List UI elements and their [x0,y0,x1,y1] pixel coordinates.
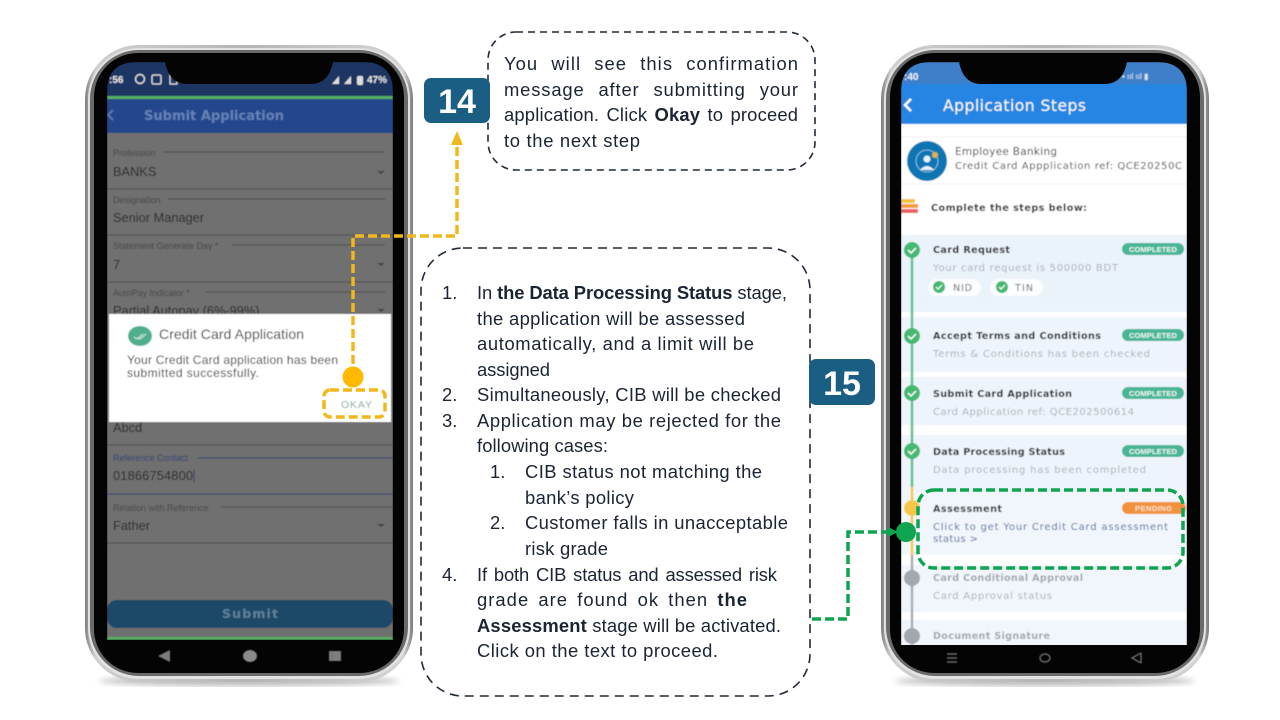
steps heading [901,199,1087,214]
account header [901,137,1187,184]
step: submit card application: Card Application ref: QCE202500614 [933,407,1134,418]
notch [165,62,333,84]
instruction 4: Click on the text to proceed. [477,640,718,661]
instruction 3 [442,410,788,559]
step: card request: Card Request [933,245,1010,256]
step: submit card application: Submit Card Application [933,389,1072,400]
step: data processing status: Data processing has been completed [933,465,1146,476]
instruction 4: Assessment stage will be activated. [477,615,781,636]
step: assessment: status > [933,534,978,545]
account header: Credit Card Appplication ref: QCE20250C [955,161,1182,172]
account header: Employee Banking [955,146,1057,158]
step: assessment [933,502,1186,545]
instruction 1: In the Data Processing Status stage, [477,282,787,303]
navigation bar [947,653,1141,663]
form fields: Father [113,518,151,533]
badge: step 14 [424,78,490,123]
callout: step 14 text: to the next step [504,130,640,151]
form fields: BANKS [113,164,156,179]
phone screen [901,62,1187,650]
step: assessment: PENDING [1135,504,1172,513]
submit button [107,600,393,628]
step: submit card application: COMPLETED [1129,389,1178,398]
instruction 4: grade are found ok then the [477,589,747,610]
step: accept terms: Accept Terms and Conditions [933,331,1101,342]
form fields: Abcd [113,420,142,435]
form fields: 7 [113,257,120,272]
app bar: ▪ ııl ııl ▮ [1122,72,1148,81]
status bar [109,74,387,86]
step: card request: Your card request is 500000 BDT [932,263,1119,274]
confirmation dialog: submitted successfully. [127,366,259,380]
step: card request: COMPLETED [1129,245,1178,254]
app bar title: Submit Application [144,109,284,124]
callout: step 14 text [488,32,815,170]
app bar: Application Steps [943,97,1086,115]
step: card conditional approval: Card Approval status [933,591,1052,602]
instruction 3: bank’s policy [525,487,635,508]
submit button: Submit [222,606,278,621]
navigation bar [158,650,341,662]
notch [959,62,1127,84]
step: accept terms [932,329,1184,360]
badge: step 15 [809,359,875,405]
form fields: Statement Generate Day * [113,241,219,251]
timeline [904,242,920,645]
yellow connector from OKAY to step 14 [324,131,463,417]
instruction 3: following cases: [477,435,608,456]
instruction 3: Application may be rejected for the [477,410,781,431]
instruction 3: 2. [490,512,505,533]
step: card request: NID [953,283,972,294]
confirmation dialog: OKAY [341,399,372,411]
form fields: AutoPay Indicator * [113,288,191,298]
step: card conditional approval: Card Conditional Approval [933,573,1083,584]
phone frame [881,45,1209,682]
right phone: application steps [881,45,1209,686]
instruction 1: 1. [442,282,457,303]
instruction 1: assigned [477,359,550,380]
step: data processing status: Data Processing Status [933,447,1065,458]
phone screen [107,62,393,640]
step: accept terms: Terms & Conditions has been checked [932,349,1150,360]
instruction 3: Customer falls in unacceptable [525,512,788,533]
callout: step 14 text: You will see this confirmation [504,53,798,74]
step: data processing status [933,445,1184,476]
step: submit card application [933,387,1184,418]
badge: step 14: 14 [438,83,476,121]
instruction 4: 4. [442,564,457,585]
step: assessment: Click to get Your Credit Card assessment [933,522,1168,533]
form fields [107,148,393,543]
form fields: Partial Autopay (6%-99%) [113,303,260,318]
instruction 3: 1. [490,461,505,482]
confirmation dialog: Your Credit Card application has been [127,353,338,367]
instruction 3: CIB status not matching the [525,461,762,482]
instruction 1: the application will be assessed [477,308,745,329]
step: assessment: Assessment [933,504,1002,515]
step: card request: TIN [1014,283,1033,294]
callout: step 14 text: message after submitting your [504,79,798,100]
instruction 1 [442,282,787,380]
form fields: Profession [113,148,156,158]
instruction 2: Simultaneously, CIB will be checked [477,384,781,405]
form fields: Designation [113,195,161,205]
step: data processing status: COMPLETED [1129,447,1178,456]
instruction 4: If both CIB status and assessed risk [477,564,778,585]
instruction 3: risk grade [525,538,608,559]
confirmation dialog: Credit Card Application [159,326,304,342]
status bar: :56 [109,75,124,86]
confirmation dialog [109,314,391,422]
form fields: Relation with Reference [113,503,209,513]
status bar: 47% [367,75,387,86]
step: document signature: Document Signature [933,631,1050,642]
instruction 1: automatically, and a limit will be [477,333,754,354]
step: accept terms: COMPLETED [1129,331,1178,340]
steps heading: Complete the steps below: [931,203,1087,214]
badge: step 15: 15 [823,365,861,403]
left phone: submit application confirmation [85,45,413,686]
app bar [901,62,1187,124]
instruction 3: 3. [442,410,457,431]
form fields: Senior Manager [113,210,205,225]
instruction 2: 2. [442,384,457,405]
app bar: :40 [904,72,919,83]
instruction 4 [442,564,781,661]
green connector from step 15 to assessment [812,490,1183,619]
callout: step 15 instructions [421,248,810,696]
form fields: Reference Contact [113,453,189,463]
form fields: 01866754800 [113,468,193,483]
step: card request [928,243,1184,296]
phone frame [85,45,413,682]
step: card conditional approval [933,573,1083,602]
callout: step 14 text: application. Click Okay to proceed [504,104,798,125]
